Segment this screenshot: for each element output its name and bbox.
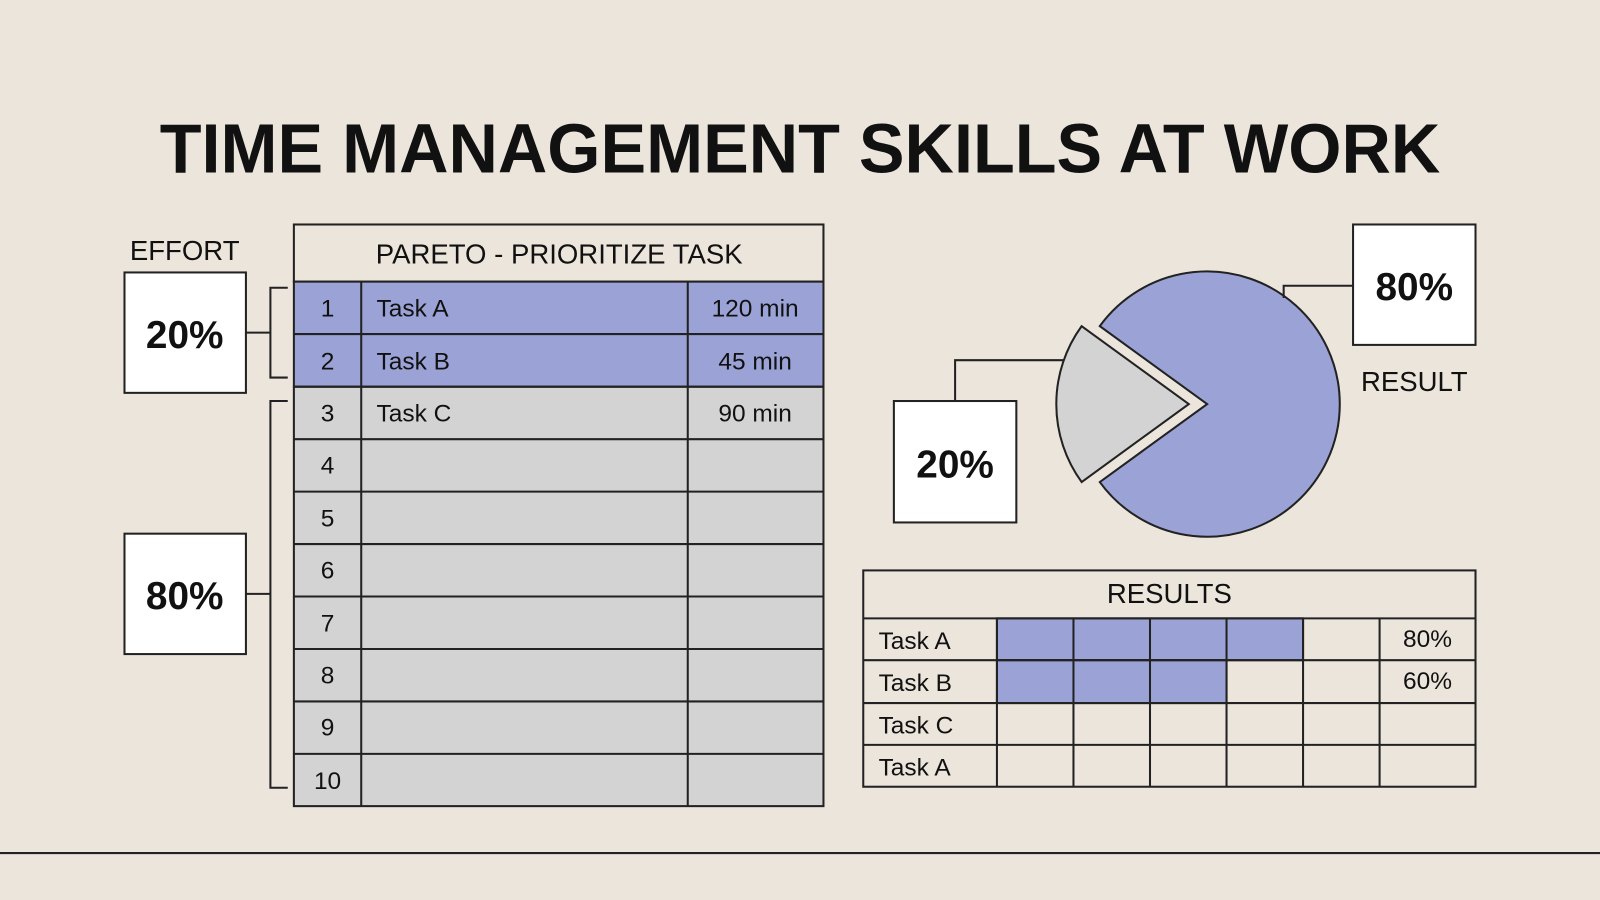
pareto table: 90 min — [718, 400, 792, 427]
results table — [863, 570, 1476, 787]
pareto table: 120 min — [712, 295, 799, 322]
results table: Task A — [879, 628, 951, 655]
pareto table: 6 — [321, 558, 334, 585]
pareto table: 45 min — [718, 348, 792, 375]
pareto table: 10 — [314, 768, 341, 795]
pareto table: Task C — [377, 400, 451, 427]
results table: Task C — [879, 713, 953, 740]
pareto table: 7 — [321, 611, 334, 638]
effort label: EFFORT — [130, 235, 240, 266]
box: effort 20%: 20% — [146, 314, 223, 357]
results table: 80% — [1403, 626, 1452, 653]
title: TIME MANAGEMENT SKILLS AT WORK — [160, 109, 1440, 187]
pareto table: 1 — [321, 295, 334, 322]
pareto table: Task A — [377, 295, 449, 322]
pareto table: PARETO - PRIORITIZE TASK — [376, 238, 743, 269]
box: effort 80%: 80% — [146, 575, 223, 618]
box: pie 20% — [894, 401, 1016, 522]
pareto table: 5 — [321, 506, 334, 533]
box: pie 20%: 20% — [916, 444, 994, 487]
pareto table: Task B — [377, 348, 450, 375]
results table: RESULTS — [1107, 578, 1232, 609]
pareto table: 2 — [321, 348, 334, 375]
pareto table: 4 — [321, 452, 334, 479]
pie chart — [1056, 271, 1340, 537]
results table: 60% — [1403, 668, 1452, 695]
pareto table: 9 — [321, 715, 334, 742]
connector: 20% — [955, 360, 1064, 401]
connector: result 80% — [1284, 286, 1353, 298]
results table: Task B — [879, 670, 952, 697]
bracket: top — [246, 288, 288, 378]
pareto table: 8 — [321, 663, 334, 690]
result label: RESULT — [1361, 366, 1468, 397]
pareto table — [294, 224, 823, 806]
box: result 80%: 80% — [1375, 266, 1453, 309]
bracket: bottom — [246, 401, 288, 788]
results table: Task A — [879, 755, 951, 782]
pareto table: 3 — [321, 400, 334, 427]
box: effort 80% — [124, 534, 246, 654]
box: effort 20% — [124, 272, 246, 393]
box: result 80% — [1353, 224, 1476, 345]
